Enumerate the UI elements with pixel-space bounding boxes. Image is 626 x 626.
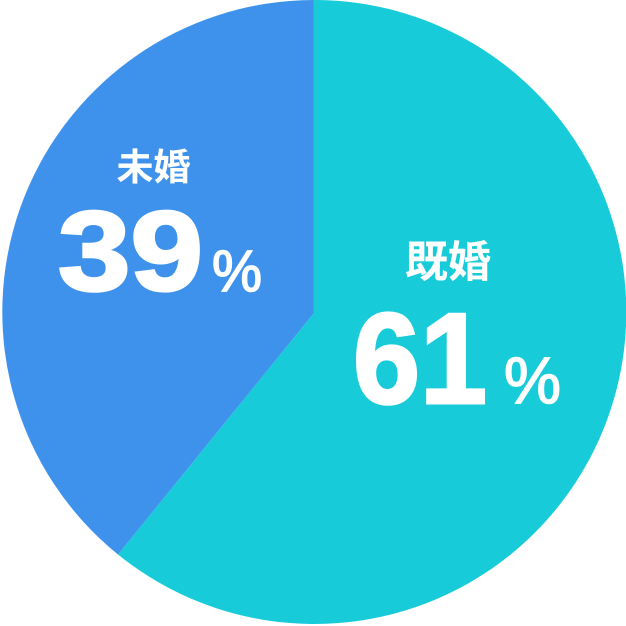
- unmarried heading: 未婚: [116, 147, 190, 188]
- married heading: 既婚: [405, 239, 491, 287]
- slice: unmarried 39%: [2, 0, 313, 554]
- married value: 61: [353, 287, 487, 431]
- unmarried percent sign: %: [212, 239, 262, 304]
- married percent sign: %: [504, 343, 561, 417]
- label: unmarried: [58, 147, 262, 314]
- unmarried value: 39: [58, 188, 203, 314]
- label: married: [353, 239, 561, 431]
